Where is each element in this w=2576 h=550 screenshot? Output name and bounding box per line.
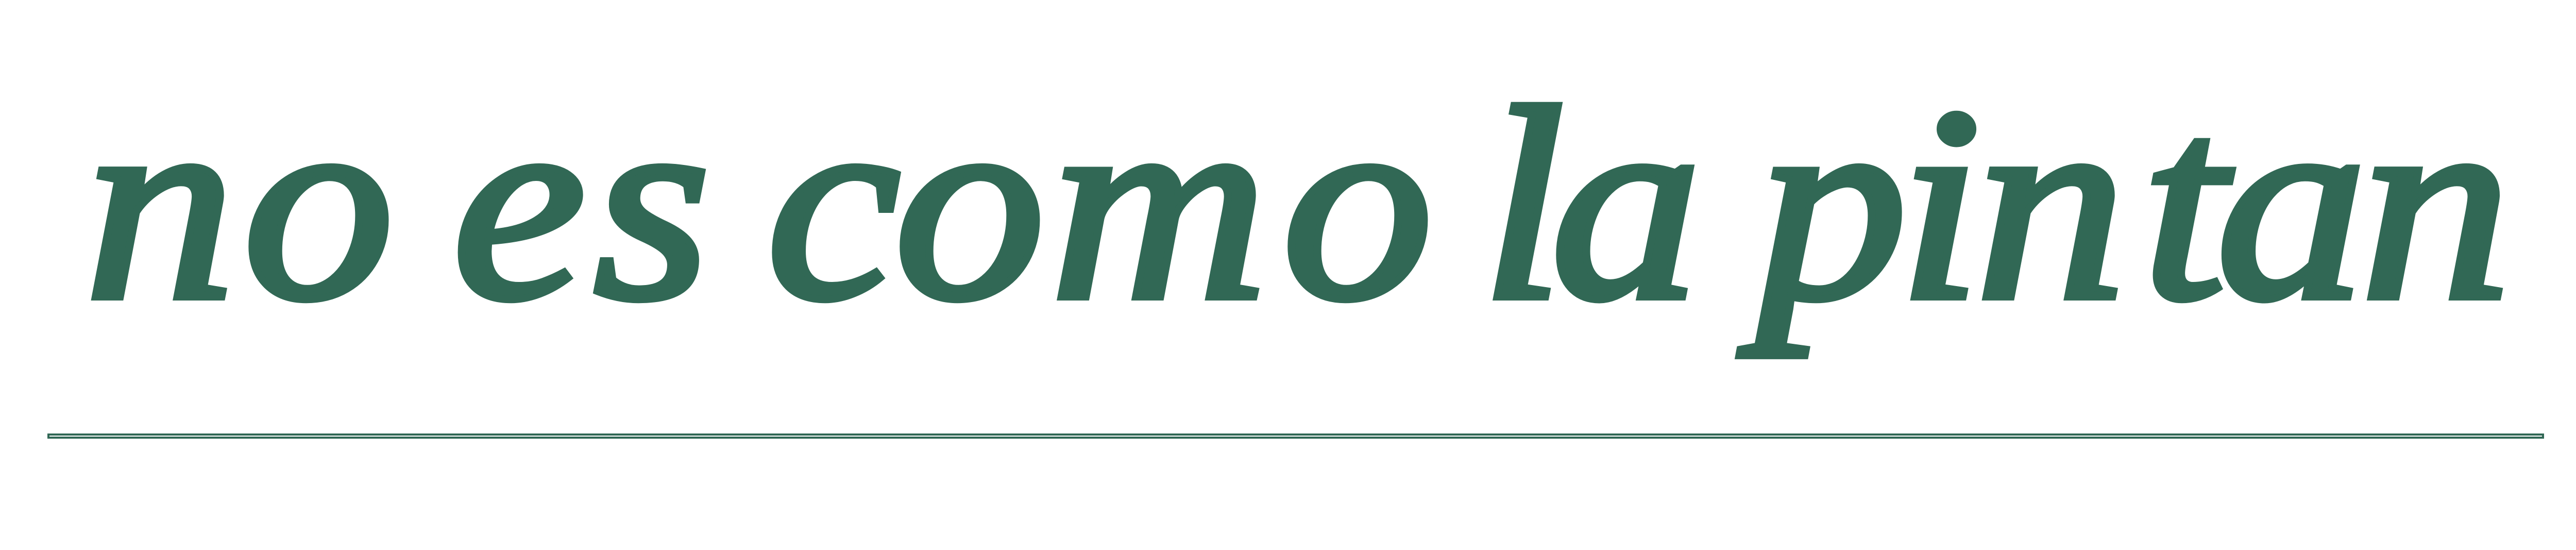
rule: double-line divider [47,434,2544,439]
title: no es como la pintan [0,52,2511,357]
